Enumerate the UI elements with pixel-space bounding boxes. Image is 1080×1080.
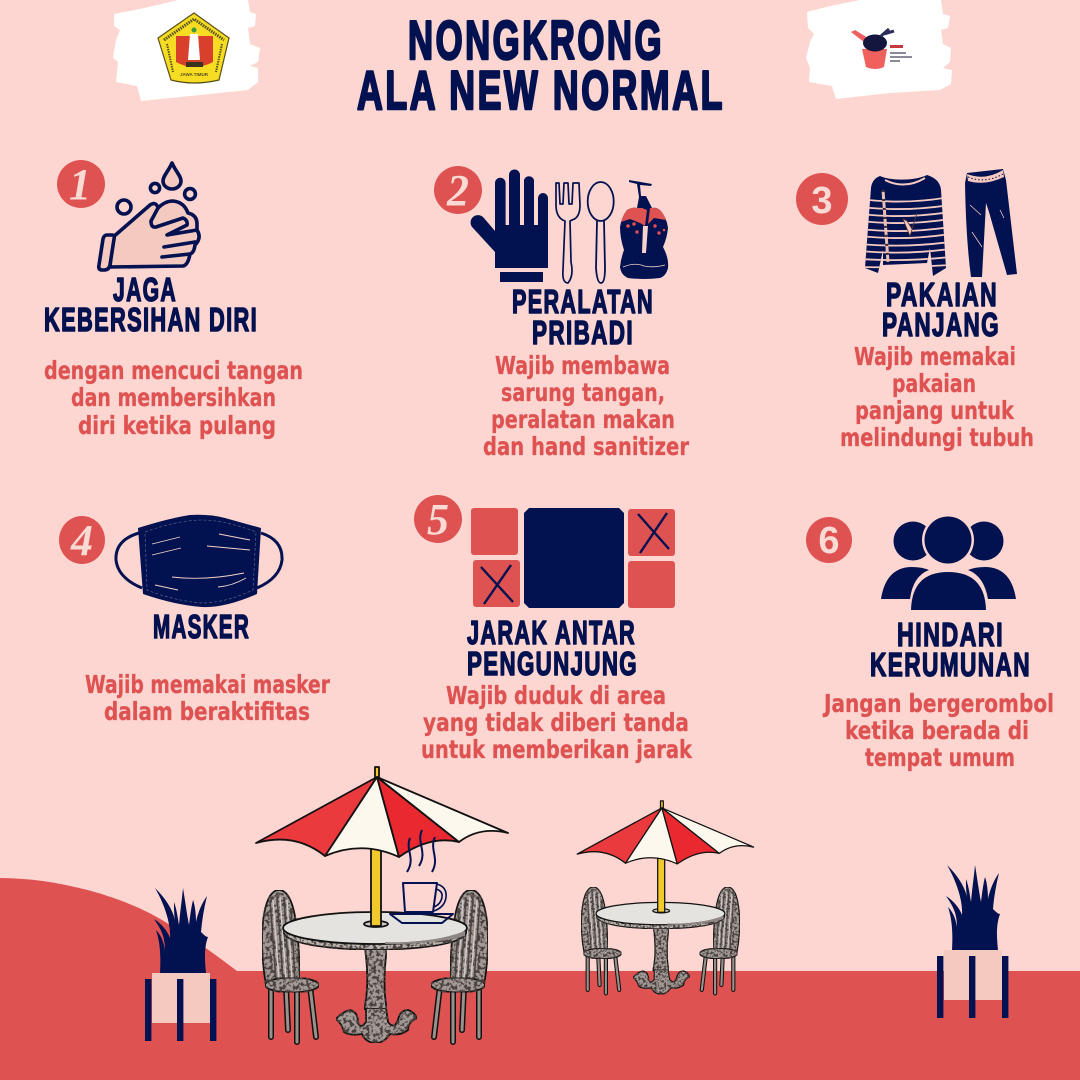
- badge 6: [806, 517, 852, 563]
- icon: hand sanitizer bottle: [620, 180, 668, 279]
- badge 3: [796, 173, 848, 225]
- description: Wajib membawa: [495, 351, 670, 380]
- description: [421, 681, 693, 764]
- description: [840, 342, 1034, 452]
- icon: coffee cup with steam: [390, 830, 453, 923]
- badge 3: 3: [811, 180, 833, 222]
- description: peralatan makan: [491, 405, 675, 434]
- badge 2: 2: [446, 166, 469, 215]
- heading: [870, 616, 1031, 683]
- description: dan hand sanitizer: [483, 432, 690, 461]
- icon: spoon: [588, 182, 614, 283]
- description: pakaian: [892, 369, 976, 398]
- description: panjang untuk: [855, 396, 1015, 425]
- description: Wajib duduk di area: [446, 681, 666, 710]
- icon: seating distance diagram: [471, 508, 675, 608]
- icon: glove: [471, 170, 548, 282]
- description: ketika berada di: [845, 716, 1029, 745]
- chair: left: [262, 890, 319, 1042]
- description: dalam beraktifitas: [104, 697, 310, 726]
- logo: university emblem on white brush patch: JAWA TIMUR: [180, 72, 209, 77]
- title: NONGKRONG: [408, 9, 664, 71]
- description: [822, 689, 1054, 772]
- icon: long trousers: [965, 169, 1017, 277]
- description: yang tidak diberi tanda: [423, 708, 689, 737]
- heading: KEBERSIHAN DIRI: [44, 301, 258, 338]
- description: Wajib memakai masker: [85, 670, 330, 699]
- table: [283, 912, 467, 1043]
- panel: 3 pakaian panjang: [796, 169, 1034, 452]
- description: tempat umum: [865, 743, 1015, 772]
- heading: PRIBADI: [532, 314, 634, 351]
- heading: PERALATAN: [512, 283, 654, 320]
- chair: right: [431, 890, 488, 1042]
- title: ALA NEW NORMAL: [357, 59, 725, 121]
- plant: left: [145, 888, 216, 1041]
- heading: MASKER: [153, 608, 250, 645]
- heading: [882, 276, 1000, 343]
- table set: large table with umbrella and chairs: [256, 767, 508, 1043]
- description: Wajib memakai: [854, 342, 1016, 371]
- icon: crowd of people: [881, 514, 1016, 610]
- icon: striped sweater: [860, 175, 950, 276]
- panel: 5 jarak antar pengunjung: [414, 495, 693, 764]
- hill and ground: [0, 878, 1080, 1080]
- logo: university emblem on white brush patch: [113, 0, 260, 101]
- title: [357, 9, 725, 121]
- badge 5: 5: [427, 495, 449, 544]
- panel: 6 hindari kerumunan: [806, 514, 1054, 772]
- heading: [467, 614, 638, 682]
- heading: PAKAIAN: [886, 276, 998, 313]
- logo: cafe mark on white brush patch: [806, 0, 952, 99]
- heading: JARAK ANTAR: [467, 614, 636, 651]
- heading: [512, 283, 654, 351]
- badge 1: [57, 160, 105, 209]
- description: [44, 356, 303, 440]
- icon: fork: [556, 183, 580, 283]
- badge 4: [59, 516, 105, 565]
- heading: HINDARI: [897, 616, 1004, 653]
- panel: 4 masker: [59, 515, 330, 726]
- panel: 1 jaga kebersihan diri: [44, 160, 303, 440]
- description: [483, 351, 690, 461]
- heading: PANJANG: [882, 306, 1000, 343]
- table set: small table with umbrella and chairs: [577, 801, 754, 994]
- badge 6: 6: [818, 520, 840, 562]
- umbrella: [256, 767, 508, 926]
- description: dengan mencuci tangan: [44, 356, 303, 385]
- badge 2: [434, 166, 482, 215]
- badge 1: 1: [69, 160, 91, 209]
- description: diri ketika pulang: [78, 411, 276, 440]
- panel: 2 peralatan pribadi: [434, 166, 690, 461]
- icon: face mask: [116, 515, 282, 607]
- description: untuk memberikan jarak: [421, 735, 693, 764]
- description: sarung tangan,: [501, 378, 665, 407]
- heading: JAGA: [113, 271, 177, 308]
- icon: washing hands: [99, 163, 199, 270]
- heading: PENGUNJUNG: [467, 645, 638, 682]
- heading: [44, 271, 258, 338]
- plant: right: [937, 865, 1008, 1018]
- badge 5: [414, 495, 462, 544]
- description: [85, 670, 330, 726]
- description: dan membersihkan: [71, 383, 276, 412]
- badge 4: 4: [70, 516, 93, 565]
